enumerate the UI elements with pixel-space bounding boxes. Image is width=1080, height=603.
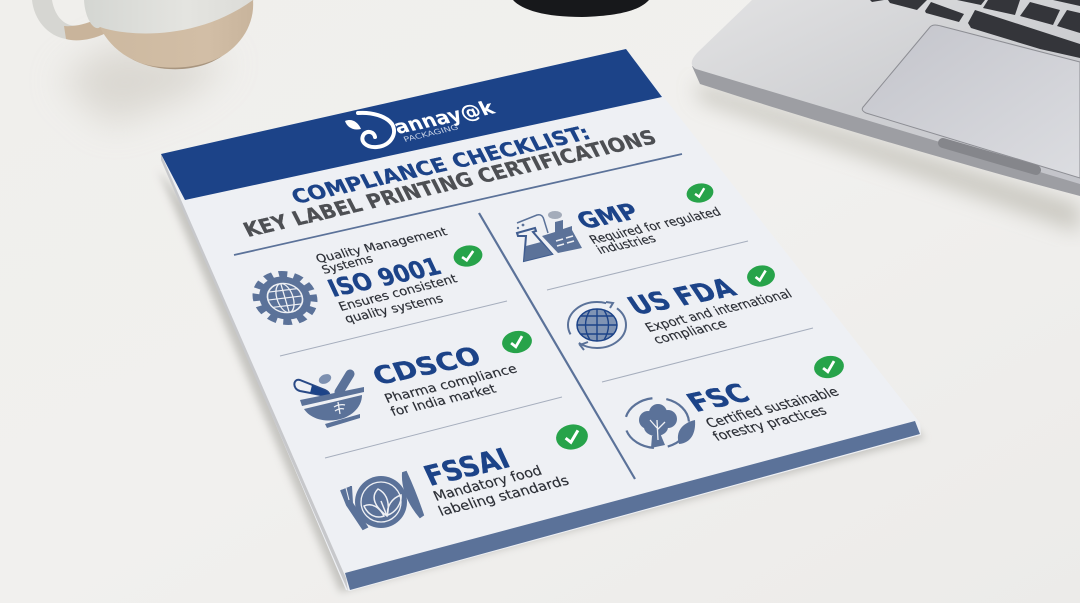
keyboard — [870, 0, 1080, 58]
coffee mug — [32, 0, 254, 125]
item: FSC — [625, 354, 846, 448]
logo — [345, 96, 499, 147]
item: ISO 9001: Systems — [319, 252, 375, 277]
item: GMP — [517, 181, 724, 261]
icon: gear and globe — [251, 272, 319, 324]
item: FSC: FSC — [680, 378, 756, 418]
item: FSSAI: labeling standards — [436, 473, 572, 520]
icon: flask and factory — [517, 211, 582, 261]
item: CDSCO: CDSCO — [368, 342, 486, 391]
check badge — [745, 263, 777, 289]
check badge — [500, 329, 534, 355]
laptop notch — [943, 143, 1036, 170]
item: US FDA: Export and international — [643, 287, 795, 335]
check badge — [812, 354, 846, 380]
item: ISO 9001: Quality Management — [313, 225, 450, 266]
title: COMPLIANCE CHECKLIST: — [287, 121, 594, 208]
item: US FDA: compliance — [651, 317, 730, 347]
check badge — [685, 181, 715, 205]
item: FSSAI: FSSAI — [419, 442, 515, 492]
item: FSC: Certified sustainable — [703, 385, 842, 431]
item: CDSCO: Pharma compliance — [382, 362, 520, 407]
item: ISO 9001: ISO 9001 — [323, 253, 445, 302]
check badge — [554, 422, 590, 452]
item: US FDA — [568, 263, 795, 350]
item: ISO 9001 — [251, 225, 484, 326]
icon: tree and leaf in cycle — [625, 398, 695, 448]
item: FSC: forestry practices — [710, 403, 830, 444]
item: FSSAI: Mandatory food — [431, 463, 545, 505]
item: GMP: Required for regulated — [586, 204, 724, 247]
laptop — [692, 0, 1080, 232]
check badge — [452, 243, 484, 269]
item: CDSCO: for India market — [388, 382, 499, 420]
paper shadow — [158, 170, 925, 592]
item: ISO 9001: quality systems — [342, 291, 445, 326]
icon: globe with arrows — [568, 302, 626, 350]
item: CDSCO — [294, 329, 534, 428]
footer band — [345, 421, 920, 590]
item: GMP: industries — [593, 231, 659, 257]
black object at top edge — [513, 0, 649, 17]
compliance sheet — [161, 49, 921, 591]
icon: plate with leaves — [341, 472, 423, 529]
item: US FDA: US FDA — [622, 274, 743, 321]
trackpad — [862, 25, 1080, 178]
dividers — [234, 154, 813, 479]
logo: annay@k — [390, 96, 499, 138]
item: GMP: GMP — [571, 199, 644, 234]
title: KEY LABEL PRINTING CERTIFICATIONS — [239, 126, 660, 241]
sheet body — [161, 49, 921, 591]
icon: mortar and pestle — [294, 372, 364, 428]
item: ISO 9001: Ensures consistent — [336, 271, 459, 314]
left paper edge — [161, 154, 348, 591]
logo: PACKAGING — [402, 123, 460, 144]
item: FSSAI — [341, 422, 590, 529]
header band — [161, 49, 662, 200]
